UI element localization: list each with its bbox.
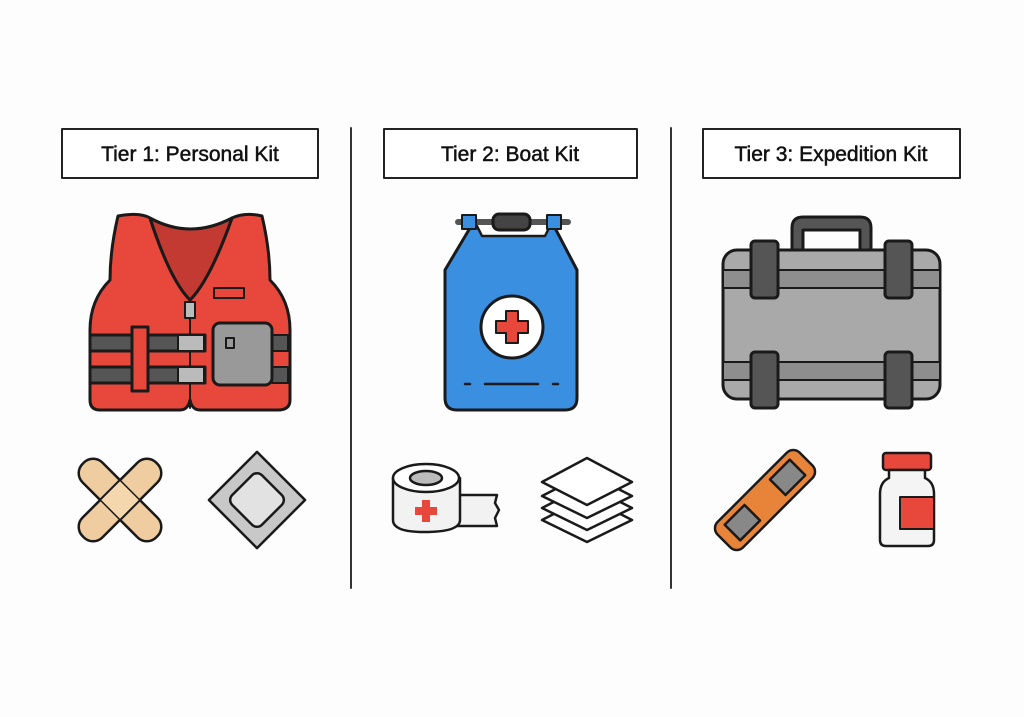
heading: Tier 1: Tier 1: Personal Kit [101,143,279,166]
heading: Tier 2: Tier 2: Boat Kit [441,143,579,166]
icon: tape roll [393,464,499,532]
icon: hard case [723,217,940,408]
icon: crossed bandages [73,453,167,547]
panel: tier 2 boat kit [384,129,637,542]
panel: tier 3 expedition kit [703,129,960,554]
icon: dry bag [445,214,577,410]
icon: sterile pad [209,452,305,548]
heading: Tier 3 [703,129,960,178]
icon: gauze stack [542,458,632,542]
heading: Tier 2 [384,129,637,178]
panel: tier 1 personal kit [62,129,318,548]
heading: Tier 1 [62,129,318,178]
heading: Tier 3: Tier 3: Expedition Kit [735,143,928,166]
icon: pill bottle [880,453,934,546]
icon: splint [711,446,819,554]
icon: life vest [90,214,290,410]
